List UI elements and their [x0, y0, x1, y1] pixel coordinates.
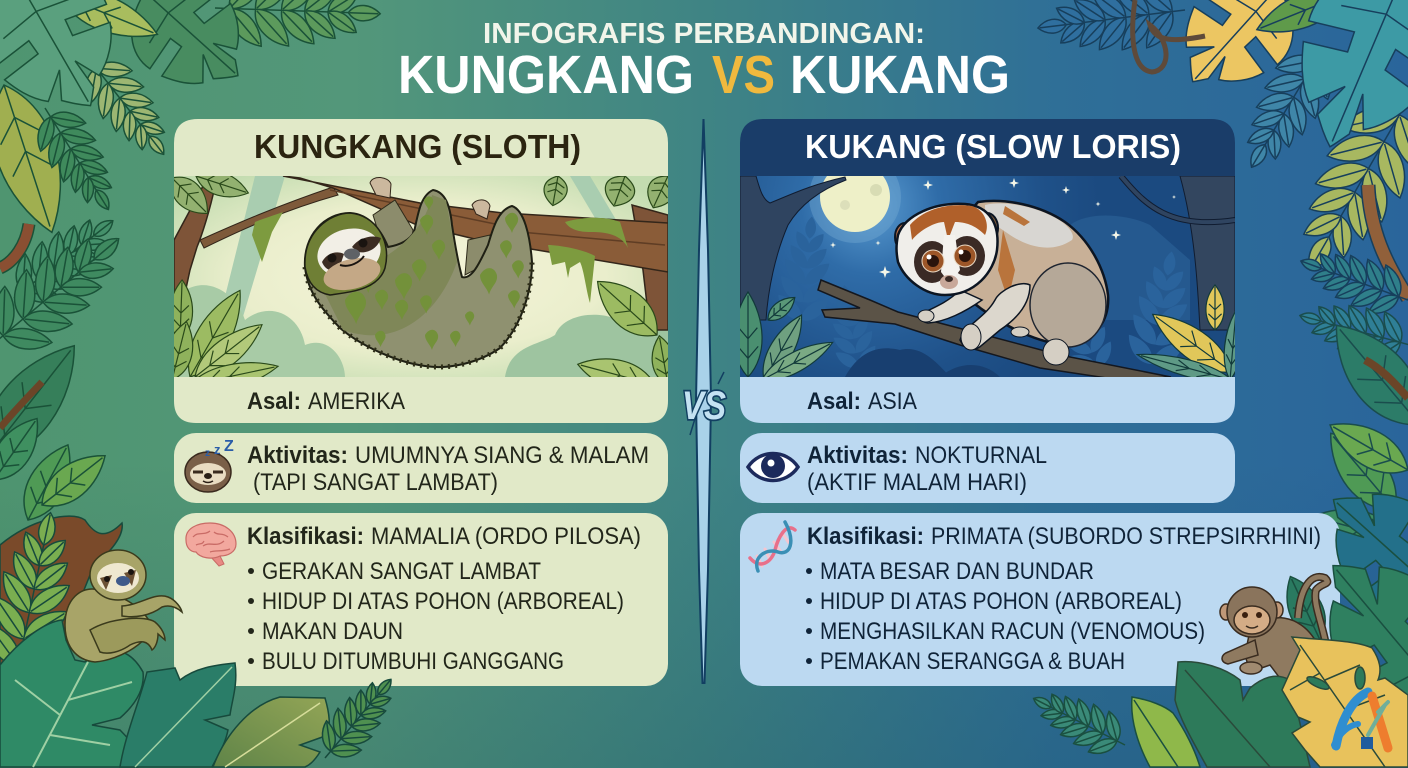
- panel header: kungkang: [174, 119, 668, 176]
- row: klasifikasi: MAMALIA (ORDO PILOSA): [371, 523, 641, 550]
- title line 2: VS: VS: [712, 45, 775, 105]
- row: aktivitas: [740, 433, 1235, 503]
- foliage: bottom-left corner: [0, 503, 412, 768]
- illustration: sloth hanging on branch: [174, 176, 668, 377]
- logo: pen and leaf mark: [1334, 692, 1388, 749]
- row: asal amerika: Asal:: [247, 388, 301, 415]
- row: aktivitas: UMUMNYA SIANG & MALAM: [355, 442, 649, 469]
- foliage: top-right corner: [1033, 0, 1408, 328]
- icon: sleeping sloth: z: [214, 442, 221, 457]
- icon: sleeping sloth: Z: [224, 438, 234, 455]
- title line 1: INFOGRAFIS PERBANDINGAN:: [483, 18, 925, 50]
- row: aktivitas: Aktivitas:: [247, 442, 348, 469]
- row: asal amerika: [174, 377, 668, 423]
- leaf: olive monstera: [213, 697, 329, 767]
- row: asal amerika: AMERIKA: [308, 388, 405, 415]
- list: sloth traits: GERAKAN SANGAT LAMBAT: [262, 558, 541, 585]
- row: klasifikasi: PRIMATA (SUBORDO STREPSIRRHINI): [931, 523, 1321, 550]
- panel header: kukang: [740, 119, 1235, 176]
- leaf: teal monstera: [120, 663, 236, 767]
- title line 2: Kungkang: KUNGKANG: [398, 45, 694, 105]
- foliage: front bottom-right leaves: [1175, 637, 1408, 767]
- panel header: kungkang: KUNGKANG (SLOTH): [254, 128, 581, 165]
- icon: sleeping sloth: [185, 438, 234, 492]
- row: klasifikasi: Klasifikasi:: [247, 523, 364, 550]
- leaf: yellow monstera: [1282, 637, 1408, 767]
- foliage: bottom-right back leaves: [1021, 458, 1408, 768]
- list: loris traits: PEMAKAN SERANGGA & BUAH: [820, 648, 1125, 675]
- illustration: small sloth on leaf: [65, 550, 182, 662]
- row: aktivitas: (AKTIF MALAM HARI): [807, 469, 1027, 496]
- row: klasifikasi: [740, 513, 1340, 686]
- row: klasifikasi: [174, 513, 668, 686]
- row: asal asia: Asal:: [807, 388, 861, 415]
- illustration: slow loris on branch at night: [740, 176, 1235, 377]
- list: loris traits: [806, 558, 1205, 675]
- row: asal asia: ASIA: [868, 388, 917, 415]
- divider with vs badge: [682, 119, 726, 683]
- foliage: right side: [1292, 287, 1408, 558]
- title line 2: Kukang: KUKANG: [790, 45, 1010, 105]
- list: loris traits: MENGHASILKAN RACUN (VENOMOUS): [820, 618, 1205, 645]
- list: sloth traits: BULU DITUMBUHI GANGGANG: [262, 648, 564, 675]
- icon: dna helix: [750, 522, 795, 571]
- foliage: top-left corner: [0, 0, 382, 324]
- divider blade: [696, 119, 711, 683]
- row: asal asia: [740, 377, 1235, 423]
- panel header: kukang: KUKANG (SLOW LORIS): [805, 128, 1181, 165]
- icon: eye: [748, 454, 798, 480]
- row: aktivitas: Aktivitas:: [807, 442, 908, 469]
- illustration: small monkey: [1220, 577, 1328, 685]
- icon: brain: [186, 523, 236, 566]
- row: aktivitas: [174, 433, 668, 503]
- vs badge: [682, 372, 726, 435]
- leaf: lime leaf: [1132, 697, 1200, 767]
- row: aktivitas: NOKTURNAL: [915, 442, 1047, 469]
- leaf: large green monstera: [0, 620, 143, 767]
- list: sloth traits: [248, 558, 624, 675]
- list: sloth traits: MAKAN DAUN: [262, 618, 403, 645]
- row: klasifikasi: Klasifikasi:: [807, 523, 924, 550]
- panel: kukang (slow loris): [734, 119, 1340, 686]
- title: [398, 18, 1010, 105]
- list: loris traits: HIDUP DI ATAS POHON (ARBOREAL): [820, 588, 1182, 615]
- list: sloth traits: HIDUP DI ATAS POHON (ARBOREAL): [262, 588, 624, 615]
- icon: sleeping sloth: z: [205, 448, 210, 459]
- panel: kungkang (sloth): [159, 119, 680, 686]
- foliage: left side: [0, 206, 147, 529]
- row: aktivitas: (TAPI SANGAT LAMBAT): [253, 469, 498, 496]
- leaf: green monstera: [1175, 662, 1310, 767]
- vs badge: VS: [682, 384, 726, 428]
- list: loris traits: MATA BESAR DAN BUNDAR: [820, 558, 1094, 585]
